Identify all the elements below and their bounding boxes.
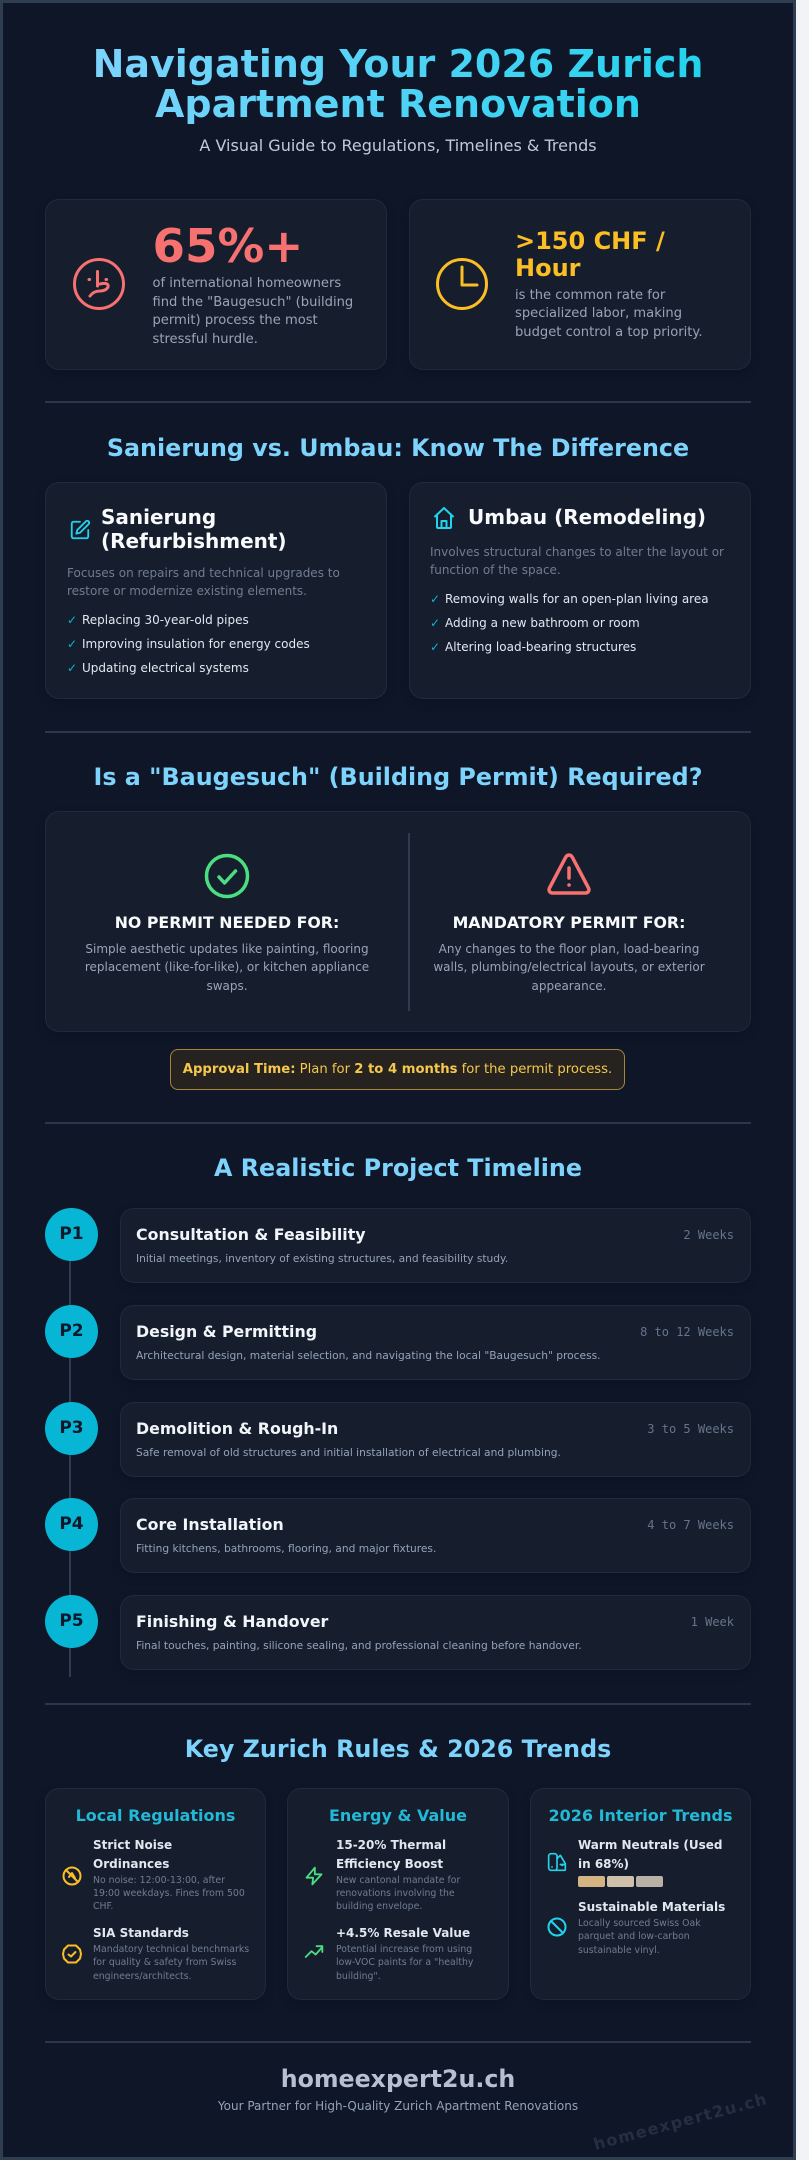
phase card: 3 to 5 Weeks — [647, 1422, 734, 1436]
icon: swatch — [548, 1852, 566, 1872]
panel: Sanierung — [45, 482, 387, 699]
item: noise: 19:00 weekdays. Fines from 500 — [93, 1888, 245, 1899]
card title — [101, 505, 287, 553]
phase card: Core Installation — [136, 1515, 284, 1534]
item: SIA — [62, 1926, 249, 1982]
item: thermal: Efficiency Boost — [336, 1857, 443, 1871]
phase card: 8 to 12 Weeks — [640, 1325, 734, 1339]
panel: energy and value — [287, 1788, 509, 2000]
column text: walls, plumbing/electrical layouts, or exterior — [433, 960, 705, 974]
timeline — [45, 1208, 751, 1677]
check list: ✓ — [430, 640, 440, 654]
heading: permit: Is a "Baugesuch" (Building Permit) Required? — [93, 763, 703, 791]
item: noise: No noise: 12:00-13:00, after — [93, 1874, 225, 1886]
title: Navigating Your 2026 Zurich — [93, 42, 703, 86]
stat text: is the common rate for — [515, 288, 665, 302]
color swatches — [578, 1876, 663, 1887]
check list: Altering load-bearing structures — [445, 640, 636, 654]
panel: permit comparison — [45, 811, 751, 1032]
column text — [433, 942, 705, 993]
stat text — [515, 288, 702, 340]
phase card: Safe removal of old structures and initial installation of electrical and plumbing. — [136, 1446, 561, 1459]
phase badge — [45, 1595, 98, 1648]
item: thermal: 15-20% Thermal — [336, 1838, 446, 1852]
item: sustainable materials: Locally sourced Swiss Oak — [578, 1918, 701, 1929]
heading: Sanierung vs. Umbau: Sanierung vs. Umbau: Know The Difference — [107, 434, 689, 462]
phase 3 — [45, 1402, 751, 1477]
heading: rules and trends: Key Zurich Rules & 2026 Trends — [185, 1735, 611, 1763]
panel: interior trends — [530, 1788, 751, 2000]
check list: Improving insulation for energy codes — [82, 637, 310, 651]
item: sustainable materials: sustainable vinyl. — [578, 1945, 660, 1956]
item: resale — [304, 1926, 473, 1982]
heading: timeline: A Realistic Project Timeline — [214, 1154, 582, 1182]
stat text: find the "Baugesuch" (building — [152, 295, 353, 310]
card description: Focuses on repairs and technical upgrades to — [67, 566, 340, 580]
panel: local regulations — [45, 1788, 266, 2000]
footer — [218, 2065, 578, 2113]
phase card — [120, 1402, 751, 1477]
column text: Any changes to the floor plan, load-bearing — [439, 942, 699, 956]
card description: function of the space. — [430, 563, 561, 577]
item: warm neutrals: Warm Neutrals (Used — [578, 1838, 723, 1852]
icon: trending up — [304, 1945, 324, 1958]
icon: house — [434, 507, 454, 529]
item: SIA: engineers/architects. — [93, 1971, 192, 1982]
stat text: stressful hurdle. — [152, 332, 258, 347]
column heading: NO PERMIT NEEDED FOR: — [115, 913, 339, 932]
card description — [430, 544, 724, 577]
stat text: specialized labor, making — [515, 306, 682, 321]
phase card: Finishing & Handover — [136, 1612, 328, 1631]
icon: stressed face — [73, 258, 125, 310]
phase 5 — [45, 1595, 751, 1670]
stat text: budget control a top priority. — [515, 325, 702, 340]
phase 4 — [45, 1498, 751, 1573]
panel: stat 65% — [45, 199, 387, 370]
phase card — [120, 1498, 751, 1573]
column text: swaps. — [206, 979, 248, 993]
item: resale: building". — [336, 1971, 381, 1982]
check list: Removing walls for an open-plan living area — [445, 592, 709, 606]
phase card — [120, 1208, 751, 1283]
callout: approval time: Approval Time: Plan for 2 to 4 months for the permit process. — [183, 1062, 612, 1077]
phase card — [120, 1595, 751, 1670]
item: noise: Ordinances — [93, 1857, 169, 1871]
check list: ✓ — [430, 592, 440, 606]
title: Apartment Renovation — [155, 82, 641, 126]
column text: Simple aesthetic updates like painting, flooring — [85, 942, 369, 956]
panel: Umbau — [409, 482, 751, 699]
phase card: 1 Week — [691, 1615, 734, 1629]
icon: bolt — [306, 1866, 322, 1886]
check list: ✓ — [430, 616, 440, 630]
item: SIA: Mandatory technical benchmarks — [93, 1944, 249, 1955]
item: noise: Strict Noise — [93, 1838, 172, 1852]
stat text — [152, 276, 353, 347]
stat value: 65%+ — [152, 220, 303, 274]
phase card: 4 to 7 Weeks — [647, 1518, 734, 1532]
card description: Involves structural changes to alter the layout or — [430, 544, 724, 558]
item: thermal: building envelope. — [336, 1901, 422, 1912]
check list: ✓ — [67, 613, 77, 627]
check list — [67, 613, 310, 675]
column text — [85, 942, 369, 993]
phase badge: P5 — [59, 1611, 84, 1631]
item: noise — [62, 1838, 245, 1912]
item: thermal: New cantonal mandate for — [336, 1874, 460, 1886]
phase badge: P1 — [59, 1224, 84, 1244]
phase badge — [45, 1305, 98, 1358]
phase badge — [45, 1208, 98, 1261]
item: warm neutrals — [548, 1838, 723, 1887]
check list — [430, 592, 709, 654]
item: resale: low-VOC paints for a "healthy — [336, 1957, 473, 1968]
phase card: Final touches, painting, silicone sealing, and professional cleaning before handover. — [136, 1639, 582, 1652]
card description: restore or modernize existing elements. — [67, 584, 307, 598]
brand: homeexpert2u.ch — [281, 2065, 515, 2093]
card title: (Refurbishment) — [101, 529, 287, 553]
phase badge — [45, 1498, 98, 1551]
icon: no noise — [62, 1866, 82, 1886]
item: SIA: SIA Standards — [93, 1926, 189, 1940]
no permit column — [85, 913, 369, 993]
item: resale: +4.5% Resale Value — [336, 1926, 470, 1940]
icon: check circle — [204, 854, 250, 898]
icon: clock — [436, 258, 488, 310]
callout: approval time — [170, 1049, 625, 1090]
item: warm neutrals: in 68%) — [578, 1857, 629, 1871]
watermark: homeexpert2u.ch — [591, 2089, 770, 2154]
icon: warning triangle — [547, 853, 591, 895]
column heading: MANDATORY PERMIT FOR: — [453, 913, 685, 932]
phase card: Demolition & Rough-In — [136, 1419, 338, 1438]
item: sustainable materials — [548, 1900, 725, 1956]
phase card: Architectural design, material selection, and navigating the local "Baugesuch" process. — [136, 1349, 601, 1362]
check list: ✓ — [67, 661, 77, 675]
phase card: Design & Permitting — [136, 1322, 317, 1341]
icon: edit — [70, 520, 90, 540]
check list: Updating electrical systems — [82, 661, 249, 675]
check list: ✓ — [67, 637, 77, 651]
panel heading: Energy & Value — [329, 1806, 467, 1825]
phase 1 — [45, 1208, 751, 1283]
card title: Sanierung — [101, 505, 216, 529]
phase badge: P2 — [59, 1321, 84, 1341]
item: thermal — [306, 1838, 460, 1912]
phase card: Initial meetings, inventory of existing structures, and feasibility study. — [136, 1252, 508, 1265]
item: thermal: renovations involving the — [336, 1888, 455, 1899]
subtitle: A Visual Guide to Regulations, Timelines & Trends — [199, 136, 597, 155]
icon: ban circle — [548, 1918, 566, 1936]
check list: Adding a new bathroom or room — [445, 616, 640, 630]
column text: appearance. — [531, 979, 606, 993]
card title: Umbau (Remodeling) — [468, 504, 706, 528]
panel heading: 2026 Interior Trends — [548, 1806, 733, 1825]
column text: replacement (like-for-like), or kitchen appliance — [85, 960, 369, 974]
stat value: Hour — [515, 254, 580, 282]
stat text: of international homeowners — [152, 276, 341, 291]
check list: Replacing 30-year-old pipes — [82, 613, 249, 627]
item: noise: CHF. — [93, 1901, 113, 1912]
stat text: permit) process the most — [152, 313, 318, 328]
title — [93, 42, 703, 126]
phase card: Fitting kitchens, bathrooms, flooring, and major fixtures. — [136, 1542, 436, 1555]
phase card: 2 Weeks — [683, 1228, 734, 1242]
icon: badge check — [62, 1944, 82, 1964]
panel: stat labor rate — [409, 199, 751, 370]
panel heading: Local Regulations — [76, 1806, 235, 1825]
card description — [67, 566, 340, 598]
mandatory permit column — [433, 913, 705, 993]
item: SIA: for quality & safety from Swiss — [93, 1957, 236, 1968]
item: sustainable materials: Sustainable Materials — [578, 1900, 725, 1914]
phase 2 — [45, 1305, 751, 1380]
phase badge: P4 — [59, 1514, 84, 1534]
stat value: >150 CHF / — [515, 226, 665, 254]
tagline: Your Partner for High-Quality Zurich Apartment Renovations — [218, 2099, 578, 2113]
phase card: Consultation & Feasibility — [136, 1225, 366, 1244]
item: sustainable materials: parquet and low-carbon — [578, 1931, 690, 1942]
stat value — [515, 226, 665, 282]
item: resale: Potential increase from using — [336, 1944, 472, 1955]
phase badge — [45, 1402, 98, 1455]
phase badge: P3 — [59, 1418, 84, 1438]
phase card — [120, 1305, 751, 1380]
